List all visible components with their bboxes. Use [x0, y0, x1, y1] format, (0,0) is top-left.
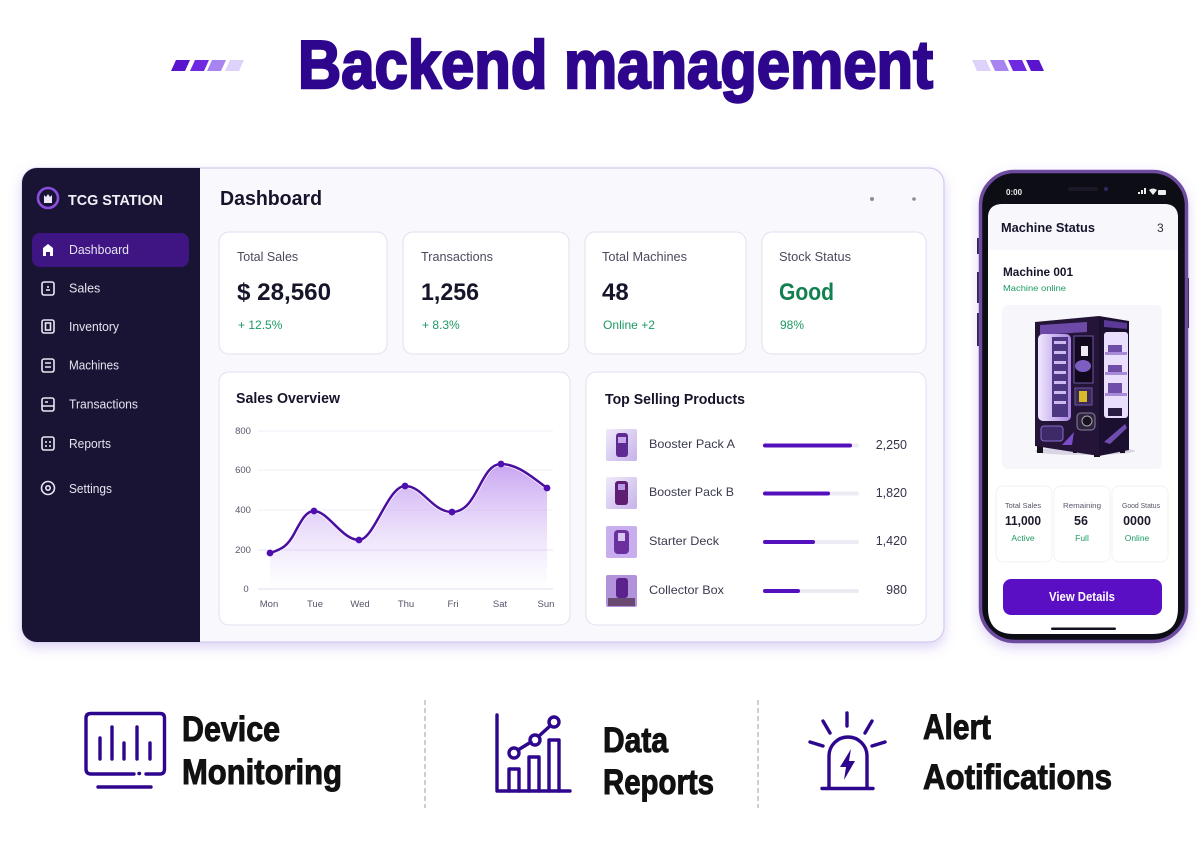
feature: Data Reports: Data — [603, 721, 668, 760]
stat cards: 11,000 — [1005, 514, 1041, 528]
product row: Collector Box: 980 — [886, 583, 907, 597]
product row: Booster Pack B: 1,820 — [876, 486, 907, 500]
feature: Alert Notifications: Aotifications — [923, 758, 1112, 797]
nav: Sales: Sales — [69, 282, 100, 296]
line chart: Thu — [398, 599, 414, 610]
product row: Collector Box — [606, 575, 907, 607]
divider — [425, 700, 758, 808]
feature: Device Monitoring — [86, 710, 342, 792]
stat cards: Good Status — [1122, 501, 1160, 510]
card: Total Machines: Online +2 — [603, 318, 655, 332]
nav: Settings — [42, 482, 112, 496]
feature: Alert Notifications — [810, 708, 1112, 797]
nav: Sales — [42, 282, 100, 296]
card: Transactions — [403, 232, 569, 354]
feature: Data Reports: Reports — [603, 763, 714, 802]
product row: Booster Pack B — [606, 477, 907, 509]
card: Transactions: Transactions — [421, 250, 493, 264]
panel: Top Selling Products: Top Selling Products — [605, 392, 745, 408]
card: Stock Status: Good — [779, 279, 834, 306]
icon: monitor — [86, 714, 164, 787]
line chart: 800 — [235, 426, 251, 437]
decoration: left title dashes — [171, 60, 244, 71]
header icons — [870, 197, 916, 201]
phone side buttons — [977, 238, 1189, 346]
nav: Settings: Settings — [69, 482, 112, 496]
feature: Alert Notifications: Alert — [923, 708, 991, 747]
card: Stock Status: 98% — [780, 318, 804, 332]
stat cards: Total Sales — [1005, 501, 1041, 510]
product row: Booster Pack A: 2,250 — [876, 438, 907, 452]
decoration: right title dashes — [972, 60, 1044, 71]
line chart: Sun — [538, 599, 554, 610]
stat cards — [996, 486, 1168, 562]
nav: Machines — [42, 358, 119, 372]
phone status bar: 0:00 — [1006, 188, 1023, 197]
line chart: 200 — [235, 545, 251, 556]
phone — [977, 172, 1189, 642]
icon: alarm beacon — [810, 713, 885, 788]
line chart: Tue — [307, 599, 323, 610]
panel: sidebar — [22, 168, 200, 642]
line chart: 0 — [243, 584, 249, 595]
nav: Transactions: Transactions — [69, 398, 138, 412]
line chart: Wed — [350, 599, 370, 610]
vending machine illustration — [1035, 316, 1135, 457]
nav: Reports: Reports — [69, 437, 111, 451]
panel: Top Selling Products — [586, 372, 926, 625]
product row: Starter Deck — [606, 526, 907, 558]
feature: Device Monitoring: Device — [182, 710, 280, 749]
machine name: Machine 001 — [1003, 267, 1074, 279]
card: Total Sales: Total Sales — [237, 250, 298, 264]
card: Total Sales: + 12.5% — [238, 318, 283, 332]
product row: Booster Pack A — [606, 429, 907, 461]
panel: dashboard window — [22, 168, 944, 642]
nav: Reports — [42, 437, 111, 451]
product row: Starter Deck: Starter Deck — [649, 534, 720, 548]
line chart — [235, 426, 554, 610]
card: Total Machines: 48 — [602, 279, 629, 306]
product row: Booster Pack B: Booster Pack B — [649, 485, 734, 499]
card: Stock Status: Stock Status — [779, 250, 851, 264]
line chart: 400 — [235, 505, 251, 516]
card: Total Machines: Total Machines — [602, 250, 687, 264]
icon: bar and line chart — [497, 715, 570, 791]
phone status bar — [1006, 187, 1166, 197]
card: Stock Status — [762, 232, 926, 354]
stat cards: Remaining — [1063, 501, 1101, 510]
button: View Details — [1003, 579, 1162, 615]
button: View Details: View Details — [1049, 590, 1115, 604]
product row: Booster Pack A: Booster Pack A — [649, 437, 735, 451]
phone screen: Machine online — [1003, 283, 1066, 293]
panel: Sales Overview — [219, 372, 570, 625]
card: Transactions: 1,256 — [421, 279, 479, 306]
heading: Dashboard: Dashboard — [220, 188, 322, 210]
title: Backend management — [298, 27, 933, 103]
card: Transactions: + 8.3% — [422, 318, 460, 332]
nav: Inventory: Inventory — [69, 320, 120, 334]
card: Total Sales — [219, 232, 387, 354]
line chart: Sat — [493, 599, 507, 610]
card: Total Sales: $ 28,560 — [237, 279, 331, 306]
nav: Dashboard active item: Dashboard — [69, 243, 129, 257]
product row: Starter Deck: 1,420 — [876, 534, 907, 548]
logo: TCG STATION — [68, 192, 163, 209]
machine image box — [1002, 305, 1162, 469]
screen header: Machine Status — [1001, 220, 1095, 235]
stat cards: Full — [1075, 533, 1089, 543]
nav: Inventory — [42, 320, 120, 334]
stat cards: 56 — [1074, 514, 1088, 528]
nav: Dashboard active item — [32, 233, 189, 267]
phone screen: 3 — [1157, 221, 1164, 235]
line chart: Mon — [260, 599, 278, 610]
stat cards: Online — [1125, 533, 1150, 543]
logo — [38, 188, 163, 209]
feature: Data Reports — [497, 715, 714, 802]
card: Total Machines — [585, 232, 746, 354]
panel: Sales Overview: Sales Overview — [236, 391, 341, 407]
stat cards: 0000 — [1123, 514, 1151, 528]
line chart: 600 — [235, 465, 251, 476]
nav: Machines: Machines — [69, 358, 119, 372]
home bar — [1051, 628, 1116, 630]
line chart: Fri — [447, 599, 459, 610]
product row: Collector Box: Collector Box — [649, 583, 724, 597]
feature: Device Monitoring: Monitoring — [182, 753, 342, 792]
stat cards: Active — [1011, 533, 1035, 543]
phone screen — [988, 204, 1178, 634]
